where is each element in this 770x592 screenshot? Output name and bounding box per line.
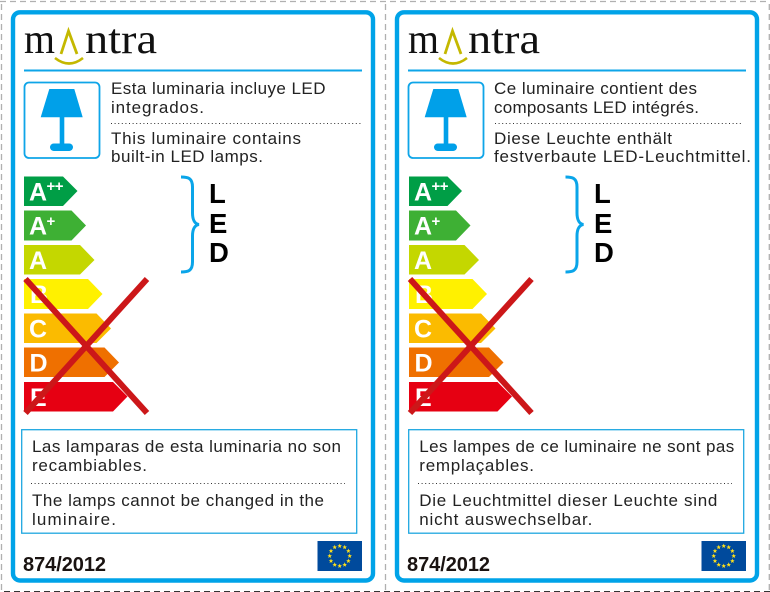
LED vertical label: E xyxy=(594,208,612,239)
energy class arrows: B xyxy=(30,281,48,309)
text: LED statement: Esta luminaria incluye LED xyxy=(111,79,326,98)
LED vertical label xyxy=(594,178,614,268)
energy class arrows: A xyxy=(29,178,47,206)
regulation number: 874/2012 xyxy=(407,554,490,576)
notice box: Les lampes de ce luminaire ne sont pas xyxy=(419,437,734,456)
icon: table lamp xyxy=(408,82,484,158)
header rule xyxy=(408,70,746,72)
LED vertical label: D xyxy=(209,237,229,268)
notice box: Die Leuchtmittel dieser Leuchte sind xyxy=(419,491,717,510)
LED vertical label: L xyxy=(594,178,611,209)
notice box: recambiables. xyxy=(32,456,147,475)
energy class arrows: A xyxy=(414,178,432,206)
notice box: luminaire. xyxy=(32,510,116,529)
logo: mantra: ntra xyxy=(85,17,157,63)
energy class arrows: A xyxy=(414,212,432,240)
energy class arrows: + xyxy=(46,213,56,230)
notice box xyxy=(409,430,744,533)
text: LED statement: Ce luminaire contient des xyxy=(494,79,697,98)
text: LED statement xyxy=(111,79,362,166)
panel: French / German label xyxy=(397,12,757,581)
LED vertical label xyxy=(209,178,229,268)
energy class arrows: C xyxy=(29,316,47,344)
brace xyxy=(566,177,584,272)
red cross xyxy=(26,279,147,413)
icon: EU flag xyxy=(318,541,362,571)
notice box xyxy=(22,430,357,533)
energy class arrows: E xyxy=(415,384,432,412)
notice box: Las lamparas de esta luminaria no son xyxy=(32,437,341,456)
brace xyxy=(181,177,199,272)
energy class arrows: + xyxy=(432,213,440,230)
icon: table lamp xyxy=(24,82,100,158)
text: LED statement: composants LED intégrés. xyxy=(494,98,699,117)
LED vertical label: D xyxy=(594,237,614,268)
energy class arrows: ++ xyxy=(46,178,64,195)
energy class arrows: D xyxy=(414,350,433,378)
notice box: The lamps cannot be changed in the xyxy=(32,491,324,510)
logo: mantra: m xyxy=(408,17,439,63)
text: LED statement: integrados. xyxy=(111,98,204,117)
text: LED statement xyxy=(494,79,751,166)
logo: mantra xyxy=(408,17,540,64)
text: LED statement: built-in LED lamps. xyxy=(111,147,263,166)
panel border xyxy=(13,12,373,581)
notice box: nicht auswechselbar. xyxy=(419,510,592,529)
text: LED statement: festverbaute LED-Leuchtmittel. xyxy=(494,147,751,166)
icon: EU flag xyxy=(702,541,746,571)
energy class arrows: A xyxy=(414,247,432,275)
panel border xyxy=(397,12,757,581)
logo: mantra xyxy=(24,17,157,64)
energy class arrows: A xyxy=(29,212,47,240)
energy class arrows: A xyxy=(29,247,47,275)
notice box: remplaçables. xyxy=(419,456,534,475)
LED vertical label: E xyxy=(209,208,227,239)
panel: Spanish / English label xyxy=(13,12,373,581)
header rule xyxy=(24,70,362,72)
energy class arrows: C xyxy=(414,316,432,344)
LED vertical label: L xyxy=(209,178,226,209)
energy class arrows: D xyxy=(30,350,48,378)
energy class arrows xyxy=(24,176,128,412)
red cross xyxy=(410,279,532,413)
logo: mantra: ntra xyxy=(468,17,540,63)
energy class arrows: ++ xyxy=(432,178,449,195)
text: LED statement: Diese Leuchte enthält xyxy=(494,129,672,148)
energy class arrows: B xyxy=(415,281,433,309)
energy class arrows: E xyxy=(30,384,47,412)
text: LED statement: This luminaire contains xyxy=(111,129,301,148)
energy class arrows xyxy=(409,176,512,412)
regulation number: 874/2012 xyxy=(23,554,106,576)
logo: mantra: m xyxy=(24,17,55,63)
